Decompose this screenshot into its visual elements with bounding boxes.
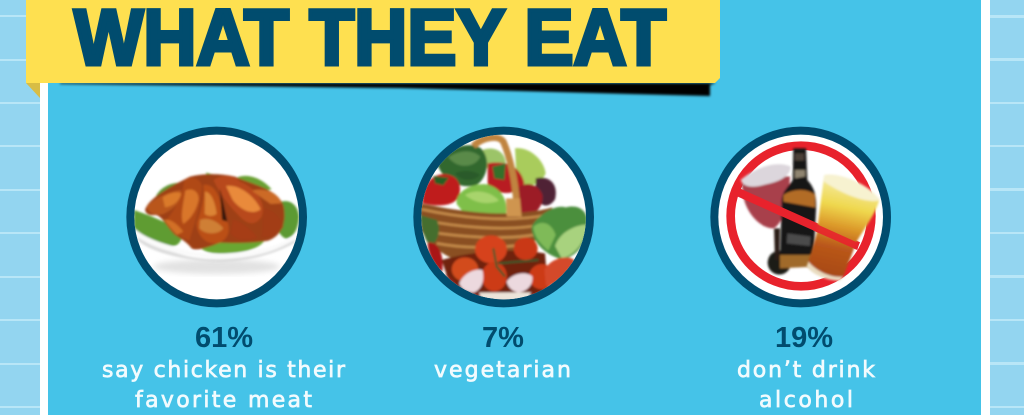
banner fold: [26, 83, 40, 98]
stat: vegetarian: [417, 131, 590, 383]
stat value: 19%: [775, 322, 833, 354]
icon: chicken wings photo: [130, 131, 303, 303]
title banner: [26, 0, 720, 83]
stat caption: don’t drink: [737, 358, 875, 383]
stat caption: alcohol: [759, 388, 853, 413]
stat: alcohol: [714, 131, 887, 413]
icon: vegetable basket photo: [417, 131, 590, 307]
left tile strip: [0, 0, 48, 415]
stat caption: vegetarian: [434, 358, 571, 383]
stat: chicken: [102, 131, 346, 413]
stat value: 61%: [195, 322, 253, 354]
stat caption: favorite meat: [135, 388, 312, 413]
icon: no alcohol photo: [714, 131, 887, 303]
right tile strip: [981, 0, 1024, 415]
stat value: 7%: [482, 322, 524, 354]
banner shadow: [60, 83, 716, 96]
stat caption: say chicken is their: [102, 358, 346, 383]
